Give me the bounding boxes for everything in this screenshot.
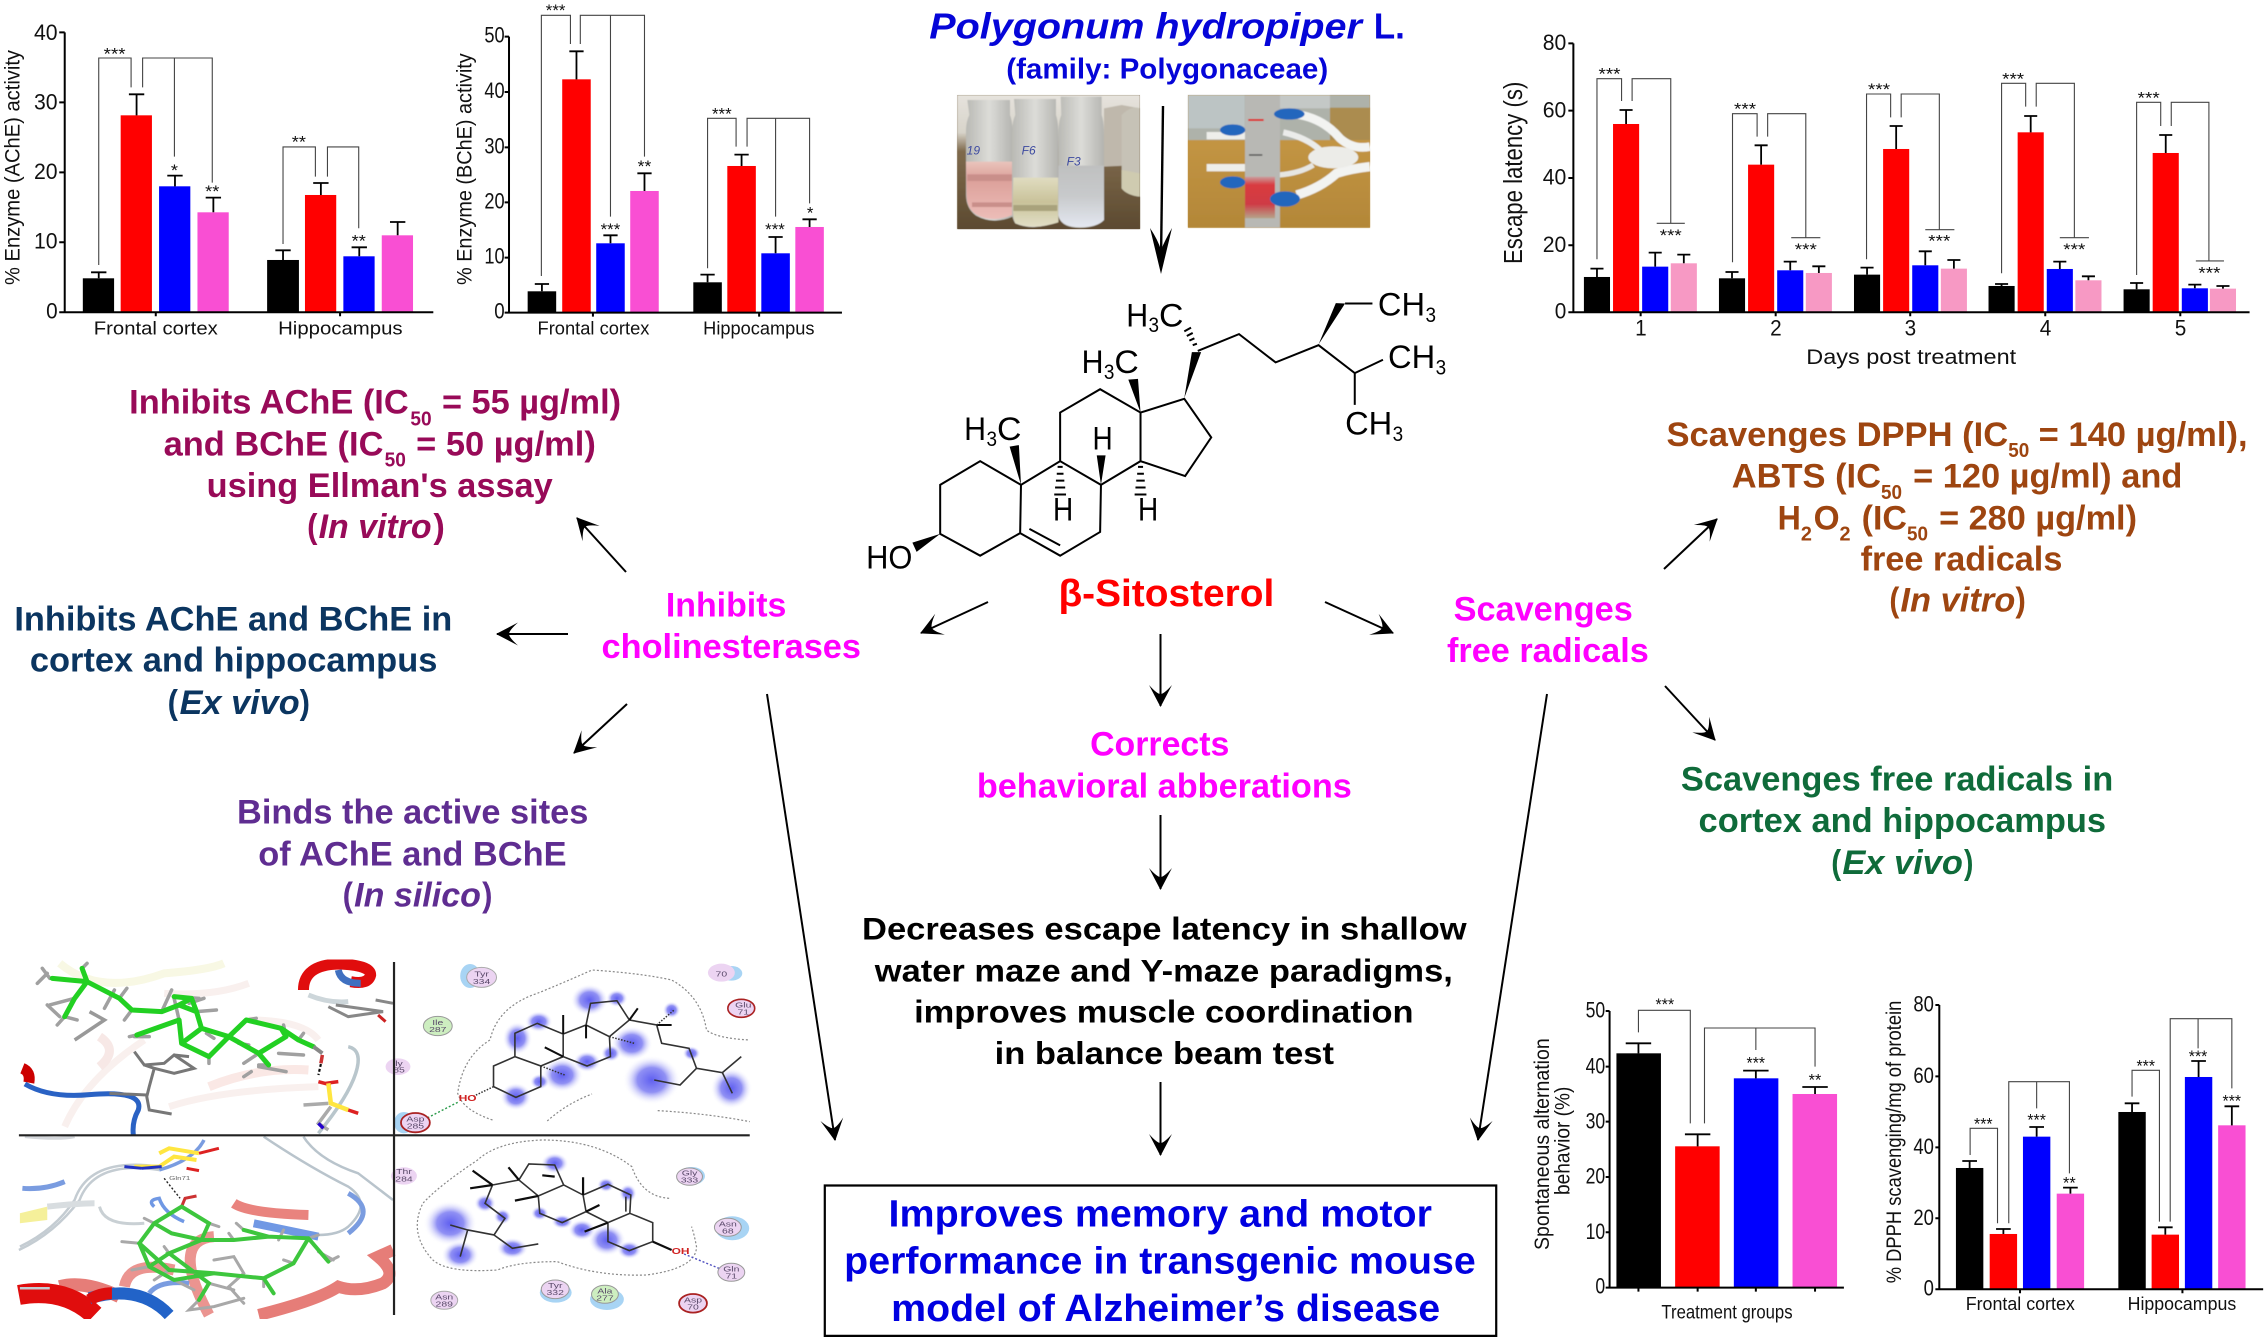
bar chart: % Enzyme (AChE) activity: Hippocampus — [278, 318, 403, 339]
heading: corrects behavioral abberations — [977, 726, 1352, 805]
residue markers — [386, 964, 755, 1133]
bars — [1616, 1053, 1837, 1288]
bar chart: % Enzyme (BChE) activity: Frontal cortex — [538, 318, 650, 339]
bar chart: % Enzyme (AChE) activity: % Enzyme (AChE) activity — [0, 50, 25, 285]
title: Polygonum hydropiper L. — [929, 7, 1405, 85]
residue markers: 284 — [395, 1175, 413, 1183]
bar chart: % DPPH scavenging: 60 — [1913, 1063, 1934, 1088]
text: in vitro radical scavenging: ABTS (IC — [1732, 458, 1881, 495]
text: in silico binding: Binds the active sites — [237, 793, 588, 831]
residue markers: 85 — [393, 1066, 405, 1074]
docking panel: bottom-left 3D pose — [19, 1137, 393, 1315]
residue markers: 289 — [436, 1300, 453, 1308]
text: in silico binding: ) — [482, 876, 492, 914]
text: in vitro radical scavenging: 2 — [1801, 522, 1812, 545]
bar chart: escape latency: 60 — [1543, 98, 1566, 123]
bar chart: spontaneous alternation behavior — [1530, 996, 1844, 1323]
bar chart: % DPPH scavenging: 20 — [1913, 1205, 1934, 1230]
bar chart: % DPPH scavenging: ** — [2063, 1174, 2076, 1192]
title: Polygonum hydropiper L.: L. — [1374, 7, 1405, 47]
photo: vials of fractions: F3 — [1067, 155, 1081, 169]
residue markers — [391, 1167, 749, 1313]
bar chart: % Enzyme (AChE) activity: 20 — [34, 159, 58, 184]
residue markers: 71 — [737, 1008, 749, 1016]
bar chart: escape latency: *** — [2198, 264, 2220, 283]
bar chart: escape latency: *** — [1928, 232, 1950, 251]
bar chart: spontaneous alternation behavior: 30 — [1586, 1108, 1605, 1133]
text: ex vivo cholinesterase inhibition: ) — [300, 683, 310, 721]
bar chart: spontaneous alternation behavior: *** — [1656, 996, 1674, 1014]
arrow: compound to free radicals — [1325, 602, 1393, 633]
residue markers: 333 — [681, 1176, 698, 1184]
bar chart: escape latency: *** — [2002, 70, 2024, 89]
docking panel dividers — [19, 962, 750, 1315]
heading: inhibits cholinesterases: cholinesterases — [602, 628, 861, 666]
photo: vials of fractions: 19 — [967, 143, 980, 157]
bar chart: % DPPH scavenging: *** — [2027, 1111, 2046, 1130]
text: in vitro cholinesterase inhibition: ) — [433, 507, 445, 545]
label: ring hydrogens: H — [1053, 492, 1073, 528]
residue markers: Gln — [723, 1265, 740, 1273]
text: ex vivo cholinesterase inhibition — [14, 600, 452, 721]
text: in vitro cholinesterase inhibition: Inhibits AChE (IC — [129, 383, 409, 421]
bar chart: escape latency: 3 — [1905, 316, 1916, 341]
bar chart: % Enzyme (BChE) activity: *** — [601, 220, 620, 239]
heading: scavenges free radicals: free radicals — [1447, 632, 1649, 670]
bar chart: escape latency: *** — [2138, 89, 2160, 108]
bar chart: % Enzyme (AChE) activity: 0 — [46, 298, 58, 323]
bar chart: spontaneous alternation behavior: 10 — [1586, 1219, 1605, 1244]
bar chart: % Enzyme (BChE) activity: *** — [765, 220, 785, 239]
text: in vitro radical scavenging: (IC — [1862, 499, 1907, 537]
bars — [1956, 1077, 2246, 1289]
residue markers: 70 — [687, 1303, 699, 1311]
docking panel: bottom-right 2D interaction map: OH — [672, 1248, 690, 1256]
label: CH3 groups — [1345, 287, 1446, 446]
photo: vials of fractions — [957, 95, 1140, 229]
title: Polygonum hydropiper L.: (family: Polygonaceae) — [1006, 54, 1328, 85]
text: in vitro cholinesterase inhibition: In vitro — [319, 507, 432, 545]
residue markers: Asp — [684, 1296, 702, 1304]
residue markers: 70 — [716, 970, 727, 978]
bar chart: spontaneous alternation behavior: behavior (%) — [1551, 1087, 1574, 1195]
arrow: latency to outcome — [1160, 1082, 1162, 1155]
bar chart: % DPPH scavenging: *** — [2136, 1057, 2155, 1075]
text: ex vivo cholinesterase inhibition: Inhibits AChE and BChE in — [14, 600, 452, 638]
residue markers: 285 — [407, 1122, 424, 1130]
bar chart: % DPPH scavenging: *** — [1974, 1115, 1993, 1134]
bar chart: % Enzyme (BChE) activity: *** — [546, 1, 566, 20]
label: CH3 groups: 3 — [1436, 356, 1446, 379]
residue markers: Glu — [735, 1001, 751, 1009]
label: CH3 groups: CH — [1378, 287, 1425, 323]
residue markers: Asp — [406, 1115, 424, 1123]
bar chart: escape latency: 1 — [1635, 316, 1647, 341]
residue markers: 287 — [429, 1026, 447, 1034]
residue markers: 68 — [722, 1227, 734, 1235]
bar chart: % Enzyme (AChE) activity — [0, 20, 433, 339]
text: in vitro radical scavenging: ( — [1889, 581, 1899, 619]
text: ex vivo radical scavenging: Ex vivo — [1842, 844, 1963, 882]
bars — [1584, 124, 2236, 312]
residue markers: Asn — [719, 1220, 737, 1228]
bar chart: % Enzyme (BChE) activity: % Enzyme (BChE) activity — [452, 53, 477, 285]
text: behavioral outcomes — [862, 911, 1468, 1071]
label: H3C upper: H — [1126, 298, 1148, 334]
text: in vitro cholinesterase inhibition: 50 — [410, 407, 432, 430]
bar chart: % Enzyme (BChE) activity: Hippocampus — [703, 318, 815, 339]
bar chart: escape latency: *** — [1598, 64, 1621, 83]
bar chart: % Enzyme (BChE) activity: 40 — [484, 78, 505, 103]
label: CH3 groups: 3 — [1393, 422, 1403, 446]
text: in silico binding — [237, 793, 588, 914]
bar chart: spontaneous alternation behavior: ** — [1809, 1071, 1821, 1090]
arrow: to radical ex vivo — [1665, 686, 1715, 740]
outcome box: performance in transgenic mouse — [844, 1240, 1476, 1283]
residue markers: 334 — [473, 978, 490, 986]
text: ex vivo cholinesterase inhibition: ( — [168, 683, 179, 721]
bar chart: % Enzyme (BChE) activity: 50 — [484, 23, 505, 48]
bar chart: % Enzyme (BChE) activity: *** — [712, 104, 732, 123]
docking panel: top-left 3D pose — [22, 963, 393, 1135]
text: ex vivo radical scavenging: ) — [1964, 844, 1973, 882]
arrow: cholinesterases to outcome — [767, 694, 835, 1140]
arrow: to radical in vitro — [1664, 519, 1717, 569]
label: H3C lower: C — [997, 412, 1021, 448]
text: in vitro cholinesterase inhibition — [129, 383, 621, 545]
text: in vitro radical scavenging: 2 — [1840, 522, 1851, 545]
label: H3C upper: C — [1159, 298, 1183, 334]
title: Polygonum hydropiper L.: Polygonum hydropiper — [929, 7, 1364, 47]
label: H3C middle: 3 — [1104, 360, 1114, 384]
residue markers: 332 — [547, 1289, 564, 1297]
label: H3C lower — [964, 412, 1021, 451]
text: in vitro radical scavenging: O — [1814, 499, 1840, 537]
text: in vitro radical scavenging: free radicals — [1861, 540, 2062, 578]
text: in vitro radical scavenging: 50 — [1907, 522, 1928, 545]
heading: corrects behavioral abberations: behavioral abberations — [977, 768, 1352, 805]
arrow: plant to compound — [1150, 106, 1172, 274]
label: HO: HO — [866, 540, 912, 576]
bar chart: escape latency: *** — [1660, 226, 1682, 245]
bar chart: % Enzyme (AChE) activity: ** — [292, 132, 306, 151]
label: H3C upper: 3 — [1149, 313, 1159, 337]
bar chart: % DPPH scavenging: *** — [2189, 1048, 2207, 1066]
bar chart: % DPPH scavenging: % DPPH scavenging/mg of protein — [1882, 1001, 1906, 1283]
label: ring hydrogens: H — [1093, 421, 1113, 457]
bar chart: escape latency: 80 — [1543, 30, 1566, 55]
bar chart: escape latency: Days post treatment — [1806, 344, 2017, 369]
outcome box — [825, 1185, 1496, 1336]
text: in vitro cholinesterase inhibition: 50 — [385, 448, 406, 471]
label: ring hydrogens: H — [1138, 492, 1158, 528]
text: in vitro radical scavenging: 50 — [1881, 481, 1902, 504]
bar chart: escape latency: Escape latency (s) — [1499, 82, 1528, 264]
arrow: to in silico — [574, 704, 627, 753]
text: in vitro radical scavenging: In vitro — [1900, 581, 2015, 619]
bar chart: % Enzyme (BChE) activity: 30 — [484, 133, 505, 158]
arrow: to ex vivo — [497, 633, 568, 635]
outcome box: model of Alzheimer’s disease — [891, 1287, 1440, 1330]
bar chart: % Enzyme (AChE) activity: 10 — [34, 229, 58, 254]
text: in vitro cholinesterase inhibition: = 55 µg/ml) — [442, 383, 621, 421]
bar chart: escape latency: *** — [1795, 240, 1817, 259]
bar chart: % Enzyme (BChE) activity: ** — [638, 157, 651, 176]
docking panel: top-right 2D interaction map — [386, 964, 755, 1133]
text: ex vivo radical scavenging: ( — [1831, 844, 1841, 882]
residue markers: 277 — [596, 1294, 614, 1302]
bar chart: % DPPH scavenging: 40 — [1913, 1134, 1934, 1159]
bar chart: % DPPH scavenging: 80 — [1913, 992, 1934, 1016]
bar chart: escape latency: 0 — [1555, 299, 1566, 324]
bar chart: % Enzyme (AChE) activity: * — [171, 161, 178, 180]
text: in vitro radical scavenging: Scavenges DPPH (IC — [1666, 416, 2008, 454]
bar chart: escape latency: 20 — [1543, 232, 1566, 257]
bar chart: % DPPH scavenging: 0 — [1924, 1275, 1934, 1300]
bar chart: % Enzyme (AChE) activity: 40 — [34, 20, 58, 45]
residue markers: Tyr — [474, 970, 489, 978]
heading: inhibits cholinesterases: Inhibits — [666, 586, 786, 624]
label: CH3 groups: CH — [1388, 340, 1435, 376]
outcome box: Improves memory and motor — [889, 1193, 1432, 1235]
bar chart: spontaneous alternation behavior: 20 — [1586, 1164, 1605, 1188]
bar chart: % Enzyme (BChE) activity: 0 — [494, 299, 505, 324]
bar chart: % Enzyme (AChE) activity: ** — [352, 231, 366, 250]
label: CH3 groups: CH — [1345, 406, 1392, 442]
bars — [528, 79, 824, 313]
text: in vitro cholinesterase inhibition: ( — [307, 507, 318, 545]
residue markers: Tyr — [548, 1282, 562, 1290]
bar chart: % Enzyme (BChE) activity — [452, 1, 842, 339]
label: H3C middle: H — [1082, 345, 1103, 381]
bar chart: % Enzyme (AChE) activity: ** — [205, 182, 220, 201]
bar chart: % Enzyme (AChE) activity: *** — [104, 44, 126, 63]
text: behavioral outcomes: Decreases escape latency in shallow — [862, 911, 1468, 946]
bar chart: spontaneous alternation behavior: Treatment groups — [1661, 1302, 1793, 1323]
bar chart: escape latency: *** — [2063, 240, 2085, 259]
residue markers: Ile — [432, 1019, 443, 1027]
bar chart: escape latency: 2 — [1770, 316, 1782, 341]
photo: separating clip and cylinder — [1188, 95, 1370, 228]
residue markers: Ala — [597, 1287, 613, 1295]
chemical structure: beta-sitosterol — [866, 287, 1446, 576]
text: behavioral outcomes: in balance beam test — [995, 1035, 1334, 1071]
heading: scavenges free radicals: Scavenges — [1454, 590, 1633, 628]
label: ring hydrogens — [1053, 421, 1158, 528]
bar chart: escape latency — [1499, 30, 2250, 369]
arrow: compound to cholinesterases — [921, 602, 988, 633]
bar chart: escape latency: 40 — [1543, 165, 1566, 190]
arrow: free radicals to outcome — [1478, 694, 1547, 1140]
bar chart: escape latency: 5 — [2175, 316, 2186, 341]
heading: inhibits cholinesterases — [602, 586, 861, 666]
bar chart: % DPPH scavenging: *** — [2223, 1092, 2241, 1111]
bar chart: spontaneous alternation behavior: Spontaneous alternation — [1530, 1038, 1554, 1250]
label: CH3 groups: 3 — [1425, 303, 1436, 327]
docking panel: bottom-left 3D pose: Gln71 — [169, 1176, 191, 1182]
docking panel: bottom-right 2D interaction map — [391, 1140, 749, 1313]
text: in silico binding: ( — [343, 876, 354, 914]
bar chart: escape latency: *** — [1868, 80, 1890, 99]
residue markers: Gly — [682, 1169, 698, 1177]
bar chart: spontaneous alternation behavior: *** — [1747, 1054, 1765, 1073]
bar chart: escape latency: 4 — [2040, 316, 2051, 341]
heading: corrects behavioral abberations: Corrects — [1090, 726, 1229, 764]
arrow: compound to behavior — [1160, 634, 1162, 706]
text: in silico binding: In silico — [354, 876, 481, 914]
text: ex vivo cholinesterase inhibition: cortex and hippocampus — [30, 641, 437, 679]
bar chart: spontaneous alternation behavior: 50 — [1586, 998, 1605, 1022]
label: H3C upper — [1126, 298, 1183, 337]
text: behavioral outcomes: improves muscle coordination — [914, 994, 1414, 1030]
text: ex vivo radical scavenging — [1681, 761, 2113, 882]
compound name: β-Sitosterol — [1058, 572, 1274, 615]
text: in vitro radical scavenging — [1666, 416, 2248, 619]
text: in vitro radical scavenging: 50 — [2008, 439, 2029, 462]
bar chart: % DPPH scavenging — [1882, 992, 2263, 1314]
bars — [83, 115, 413, 312]
text: in vitro radical scavenging: H — [1778, 499, 1801, 537]
text: in vitro cholinesterase inhibition: using Ellman's assay — [207, 466, 553, 504]
text: behavioral outcomes: water maze and Y-maze paradigms, — [874, 953, 1453, 988]
text: in vitro cholinesterase inhibition: = 50 µg/ml) — [416, 425, 596, 463]
label: H3C middle — [1082, 345, 1139, 384]
heading: scavenges free radicals — [1447, 590, 1649, 670]
bar chart: % Enzyme (BChE) activity: * — [807, 203, 814, 222]
label: H3C lower: 3 — [986, 427, 997, 451]
photo: vials of fractions: F6 — [1022, 143, 1036, 157]
residue markers: Asn — [435, 1293, 453, 1301]
bar chart: spontaneous alternation behavior: 40 — [1586, 1053, 1605, 1078]
text: in silico binding: of AChE and BChE — [258, 835, 567, 873]
text: ex vivo cholinesterase inhibition: Ex vivo — [180, 683, 300, 721]
bar chart: % Enzyme (BChE) activity: 20 — [484, 188, 505, 213]
text: in vitro cholinesterase inhibition: and BChE (IC — [164, 425, 383, 463]
bar chart: % Enzyme (AChE) activity: 30 — [34, 89, 58, 114]
docking panel: top-right 2D interaction map: HO — [459, 1095, 477, 1103]
label: H3C lower: H — [964, 412, 986, 448]
bar chart: escape latency: *** — [1734, 100, 1756, 119]
residue markers: Thr — [396, 1168, 412, 1176]
bar chart: % Enzyme (BChE) activity: 10 — [484, 244, 505, 269]
bar chart: % Enzyme (AChE) activity: Frontal cortex — [94, 318, 218, 339]
text: in vitro radical scavenging: = 280 µg/ml) — [1939, 499, 2137, 537]
bar chart: spontaneous alternation behavior: 0 — [1595, 1274, 1605, 1298]
bar chart: % DPPH scavenging: Frontal cortex — [1966, 1293, 2075, 1314]
arrow: to in vitro — [577, 518, 626, 572]
arrow: behavior to latency — [1160, 815, 1162, 889]
text: in vitro radical scavenging: ) — [2015, 581, 2026, 619]
label: H3C middle: C — [1114, 345, 1139, 381]
residue markers: ly — [395, 1060, 403, 1068]
residue markers: 71 — [726, 1272, 737, 1280]
